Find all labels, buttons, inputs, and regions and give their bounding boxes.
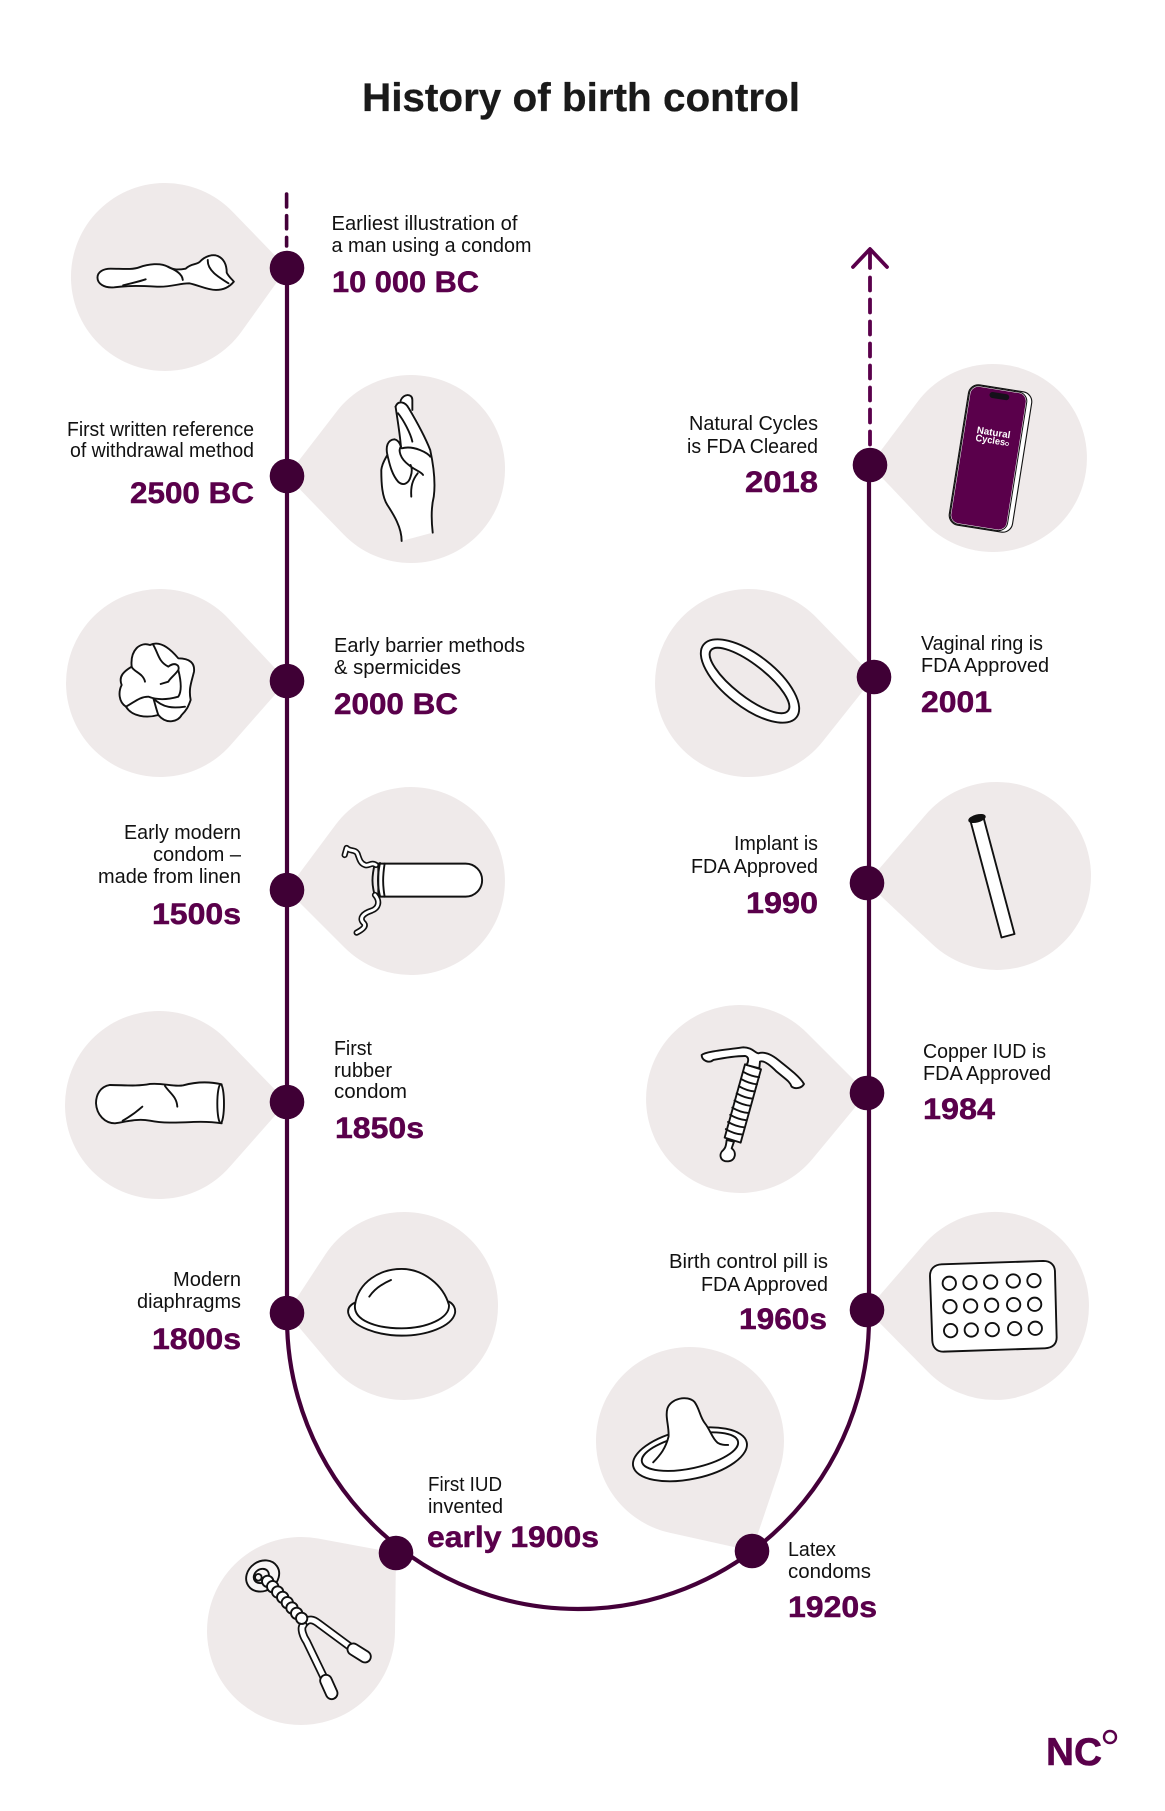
icon: latex condom (627, 1398, 753, 1491)
icon: copper IUD (702, 1047, 804, 1161)
label (923, 1041, 1051, 1126)
label: 1990 (746, 887, 818, 920)
label: condom (334, 1081, 407, 1103)
label: 2000 BC (334, 688, 458, 721)
icon: phone with app: Cycles (975, 433, 1006, 449)
dot (735, 1534, 769, 1568)
bubble (596, 1347, 784, 1551)
logo: NC: NC (1046, 1731, 1102, 1774)
dot (379, 1536, 413, 1570)
bubble (867, 782, 1091, 970)
icon: rubber condom (96, 1082, 224, 1123)
milestone: 10 000 BC (71, 183, 532, 371)
label: is FDA Cleared (687, 436, 818, 458)
dot (270, 664, 304, 698)
label: 1960s (739, 1303, 827, 1336)
label: condoms (788, 1561, 871, 1583)
dot (270, 251, 304, 285)
bubble (867, 1212, 1089, 1400)
dot (270, 1296, 304, 1330)
milestone: 2500 BC (67, 375, 505, 563)
label (332, 213, 532, 299)
label: condom – (153, 844, 242, 866)
dot (850, 1293, 884, 1327)
label: 2001 (921, 686, 992, 719)
icon: implant (968, 814, 1014, 938)
icon: linen condom with ties (345, 848, 482, 933)
dot (850, 1076, 884, 1110)
label: 10 000 BC (332, 266, 479, 299)
icon: unrolled condom (97, 255, 234, 290)
label (334, 635, 525, 721)
label: First (334, 1038, 372, 1060)
bubble (870, 364, 1087, 552)
label (137, 1269, 241, 1356)
milestone: 1984 (646, 1005, 1051, 1193)
icon: crossed fingers (381, 395, 434, 541)
label: Latex (788, 1539, 836, 1561)
label: Modern (173, 1269, 241, 1291)
label: Early modern (124, 822, 241, 844)
label: rubber (334, 1060, 392, 1082)
label: 1920s (788, 1591, 877, 1624)
label: FDA Approved (691, 856, 818, 878)
icon: phone with app: Natural (976, 425, 1011, 441)
label: early 1900s (427, 1521, 599, 1554)
label: First written reference (67, 419, 254, 441)
label (788, 1539, 877, 1624)
dot (850, 866, 884, 900)
label: Birth control pill is (669, 1251, 828, 1273)
bubble (71, 183, 287, 371)
bubble (207, 1537, 396, 1725)
label (67, 419, 254, 510)
label: a man using a condom (332, 235, 532, 257)
milestone: 1850s (65, 1011, 424, 1199)
label (921, 633, 1049, 719)
label: of withdrawal method (70, 440, 254, 462)
label (687, 413, 818, 499)
label (691, 833, 818, 920)
milestone: 2018 (687, 364, 1087, 552)
label: 1800s (152, 1323, 241, 1356)
icon: pill pack (930, 1261, 1057, 1352)
label: First IUD (428, 1474, 502, 1496)
icon: diaphragm (348, 1269, 455, 1336)
bubble (65, 1011, 287, 1199)
title: History of birth control (362, 76, 800, 120)
icon: vaginal ring (688, 624, 812, 738)
bubble (287, 787, 505, 975)
label: Earliest illustration of (332, 213, 518, 235)
label: 1500s (152, 898, 241, 931)
label (669, 1251, 828, 1336)
label: FDA Approved (921, 655, 1049, 677)
label: Early barrier methods (334, 635, 525, 657)
dot (270, 873, 304, 907)
milestone: 1500s (98, 787, 505, 975)
label: Natural Cycles (689, 413, 818, 435)
label: Implant is (734, 833, 818, 855)
label: Vaginal ring is (921, 633, 1043, 655)
label: FDA Approved (923, 1063, 1051, 1085)
label: 1984 (923, 1093, 995, 1126)
label: diaphragms (137, 1291, 241, 1313)
label (334, 1038, 424, 1145)
label (98, 822, 242, 931)
icon: phone with app (948, 383, 1033, 534)
dot (857, 660, 891, 694)
bubble (66, 589, 287, 777)
bubble (646, 1005, 867, 1193)
milestone: early 1900s (207, 1474, 599, 1725)
dot (270, 1085, 304, 1119)
label: FDA Approved (701, 1274, 828, 1296)
label: 1850s (335, 1112, 424, 1145)
label: 2500 BC (130, 477, 254, 510)
dot (853, 448, 887, 482)
bubble (287, 1212, 498, 1400)
milestone: 1990 (691, 782, 1091, 970)
bubble (287, 375, 505, 563)
milestone: 1960s (669, 1212, 1089, 1400)
milestone: 2001 (655, 589, 1049, 777)
label: invented (428, 1496, 503, 1518)
milestone: 2000 BC (66, 589, 525, 777)
icon: first IUD (240, 1554, 365, 1693)
label (427, 1474, 599, 1554)
label: made from linen (98, 866, 241, 888)
milestone: 1800s (137, 1212, 498, 1400)
label: & spermicides (334, 657, 461, 679)
arrow: future direction (853, 249, 887, 446)
dot (270, 459, 304, 493)
label: 2018 (745, 466, 818, 499)
bubble (655, 589, 874, 777)
timeline line (287, 194, 869, 1609)
label: Copper IUD is (923, 1041, 1046, 1063)
milestone: 1920s (596, 1347, 877, 1624)
icon: sponge (120, 643, 194, 721)
